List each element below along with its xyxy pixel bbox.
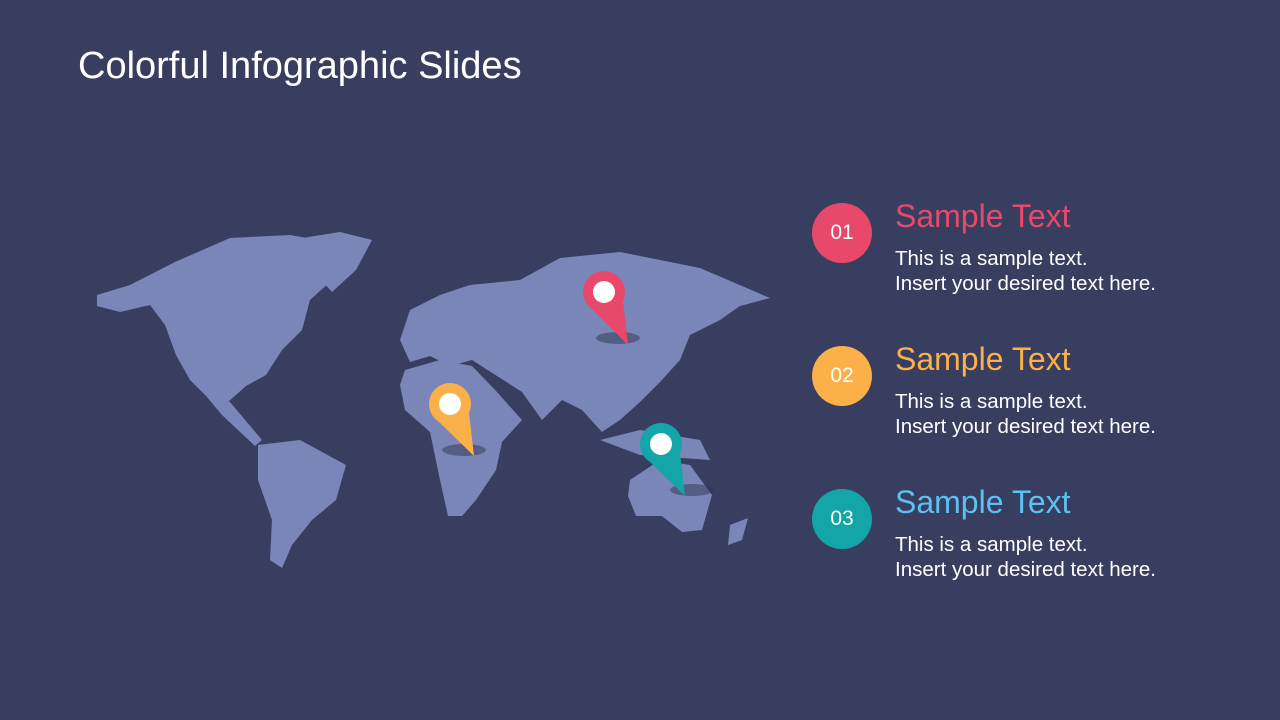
continent: eurasia	[400, 252, 770, 432]
pin: red	[583, 271, 640, 345]
islands	[600, 430, 710, 460]
item 01: Sample Text	[895, 198, 1070, 234]
title: Colorful Infographic Slides	[78, 45, 522, 87]
item 03: 03	[830, 507, 854, 530]
pin: teal	[640, 423, 714, 496]
continent: greenland	[290, 232, 372, 292]
item 01	[812, 198, 1156, 295]
item 02: This is a sample text.	[895, 390, 1088, 413]
continent: central america	[206, 396, 262, 446]
item 02	[812, 341, 1156, 438]
item 03: This is a sample text.	[895, 533, 1088, 556]
pin: orange	[429, 383, 486, 456]
item 01: 01	[830, 221, 854, 244]
item 03	[812, 484, 1156, 581]
item 02: 02	[830, 364, 854, 387]
item 02: Insert your desired text here.	[895, 415, 1156, 438]
item 01: This is a sample text.	[895, 247, 1088, 270]
item 03: Insert your desired text here.	[895, 558, 1156, 581]
continent: south america	[258, 440, 346, 568]
item 01: Insert your desired text here.	[895, 272, 1156, 295]
continent: africa	[400, 360, 522, 516]
continent: north america	[97, 235, 345, 402]
continent: australia	[628, 460, 712, 532]
item 02: Sample Text	[895, 341, 1070, 377]
item 03: Sample Text	[895, 484, 1070, 520]
